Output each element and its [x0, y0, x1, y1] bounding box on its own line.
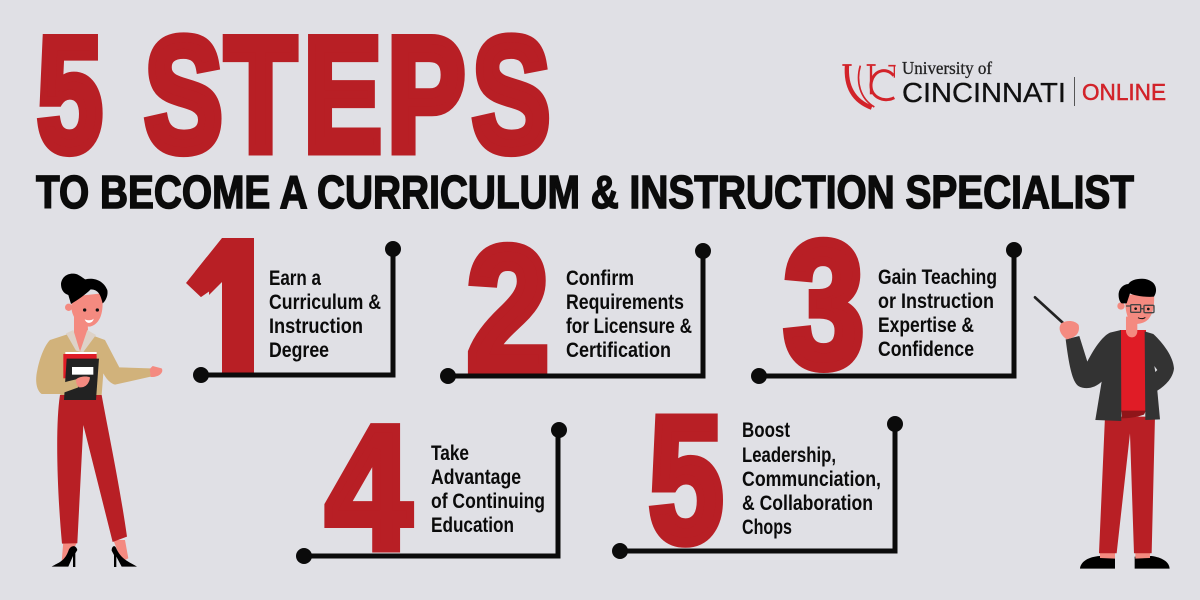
step 2 number: 2 — [467, 212, 549, 407]
step 5 — [612, 380, 903, 579]
woman: heels — [52, 546, 137, 567]
woman: white book label — [72, 367, 93, 375]
man: ankles — [1100, 552, 1150, 559]
step 5 text: Chops — [742, 516, 792, 539]
woman: neck — [74, 317, 88, 352]
step 1 — [186, 238, 401, 383]
step 4 connector line — [296, 422, 567, 564]
step 1 text: Instruction — [269, 315, 363, 338]
step 5 text: Communciation, — [742, 468, 881, 491]
step 2 connector line — [440, 243, 711, 384]
step 1 connector line — [193, 241, 401, 383]
man: hair — [1119, 279, 1156, 303]
logo: University of: University of — [902, 58, 992, 78]
man: head — [1125, 293, 1154, 324]
step 1 number: 1 — [184, 207, 274, 406]
step 5 text — [742, 419, 881, 539]
man: sweater — [1120, 330, 1146, 412]
step 5 text: Boost — [742, 419, 790, 442]
step 2 text — [566, 267, 692, 362]
man: sweater shadow — [1121, 411, 1146, 418]
woman: head — [72, 293, 103, 327]
step 1 text: Earn a — [269, 267, 321, 290]
woman: hand on book — [42, 376, 90, 394]
woman: face details — [83, 308, 99, 323]
man: pointer stick — [1035, 297, 1063, 323]
illustration: woman holding books — [36, 274, 162, 567]
logo: divider — [1074, 77, 1075, 106]
logo: UC monogram — [842, 65, 896, 108]
step 3 connector line — [751, 242, 1022, 384]
logo: Online: ONLINE — [1082, 79, 1166, 105]
step 2 — [440, 212, 711, 407]
man: neck — [1126, 317, 1137, 337]
woman: collar — [66, 330, 96, 352]
step 4 text — [431, 442, 545, 537]
step 2 text: Certification — [566, 339, 671, 362]
man: jacket — [1066, 330, 1174, 421]
man: eyes and mouth — [1134, 307, 1150, 319]
step 4 — [296, 391, 567, 586]
step 4 text: of Continuing — [431, 490, 545, 513]
man: shoes — [1080, 556, 1170, 569]
step 3 text: Gain Teaching — [878, 266, 997, 289]
step 5 text: & Collaboration — [742, 492, 873, 515]
logo: University of Cincinnati Online — [842, 58, 1166, 108]
woman: black book — [64, 359, 99, 400]
step 3 text: Confidence — [878, 338, 974, 361]
step 3 text: or Instruction — [878, 290, 994, 313]
logo: Cincinnati: CINCINNATI — [902, 77, 1066, 108]
man: glasses — [1126, 305, 1154, 313]
woman: hair — [61, 274, 108, 304]
step 4 text: Take — [431, 442, 469, 465]
step 2 text: Requirements — [566, 291, 684, 314]
step 5 number: 5 — [649, 380, 723, 579]
step 3 number: 3 — [784, 205, 864, 404]
man: trousers — [1099, 417, 1155, 553]
step 3 — [751, 205, 1022, 404]
man: hand — [1060, 321, 1079, 339]
woman: jacket — [36, 334, 151, 395]
woman: ear — [65, 304, 72, 311]
step 2 text: for Licensure & — [566, 315, 692, 338]
step 4 text: Education — [431, 514, 514, 537]
title: 5 STEPS — [0, 4, 550, 185]
woman: raised hand — [150, 366, 162, 377]
woman: red book — [63, 352, 97, 378]
step 1 text: Degree — [269, 339, 329, 362]
step 1 text: Curriculum & — [269, 291, 381, 314]
step 5 text: Leadership, — [742, 444, 836, 467]
woman: trousers — [57, 395, 127, 544]
illustration: man with pointer — [1035, 279, 1174, 569]
step 2 text: Confirm — [566, 267, 634, 290]
step 4 text: Advantage — [431, 466, 521, 489]
step 4 number: 4 — [326, 391, 411, 586]
step 1 text — [269, 267, 381, 362]
step 3 text — [878, 266, 997, 361]
step 3 text: Expertise & — [878, 314, 974, 337]
step 5 connector line — [612, 416, 903, 559]
woman: feet — [62, 540, 128, 562]
